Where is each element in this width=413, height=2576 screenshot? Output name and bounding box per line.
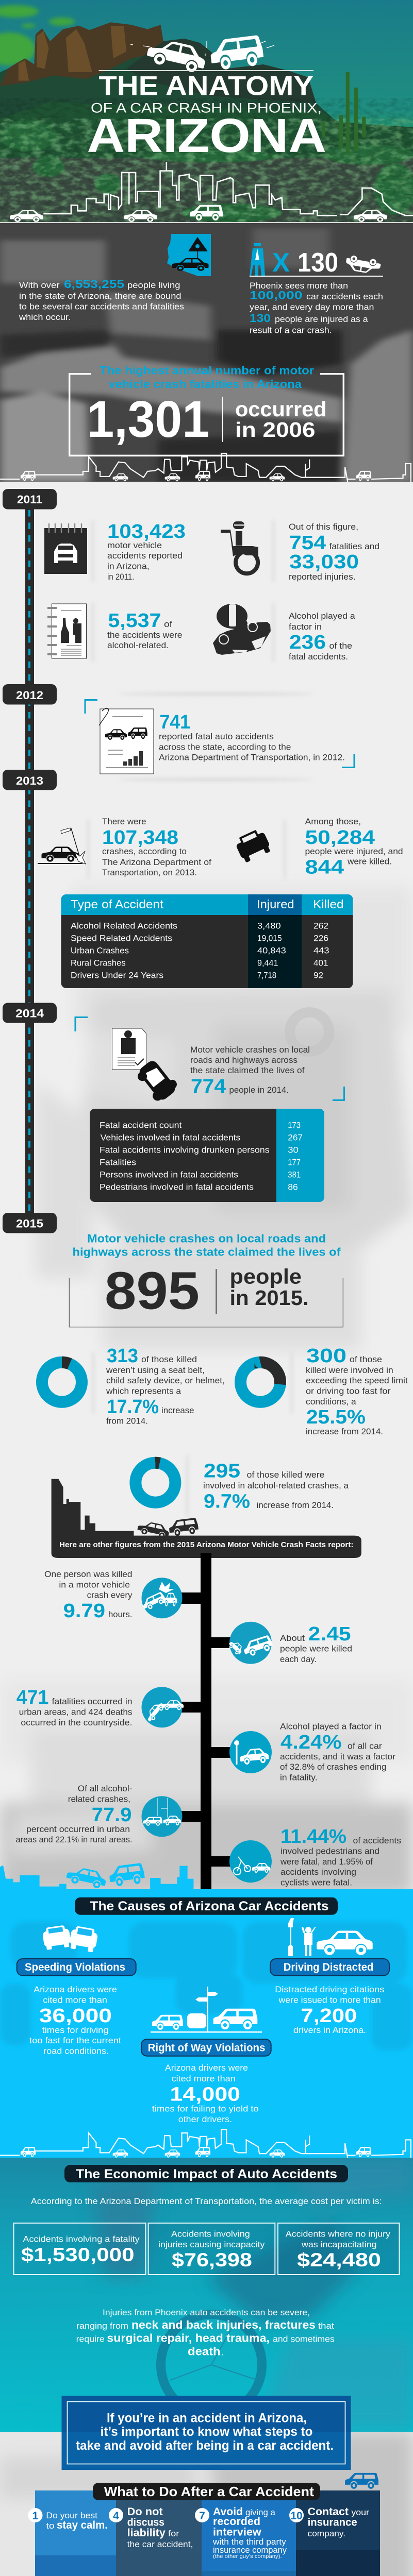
text: average cost intro: According to the Arizona Department of Transportation, the average cost per victim is:	[31, 2196, 382, 2206]
callout: highest annual fatalities: occurred	[235, 397, 327, 421]
stat: alcohol 4.24%: of all car	[348, 1742, 382, 1751]
icon: Arizona map with warning sign	[167, 234, 211, 276]
text block: Phoenix accidents: 100,000	[250, 289, 302, 302]
text block: 107,348 crashes: Transportation, on 2013.	[102, 868, 197, 877]
table: type of accident: Injured	[257, 897, 294, 911]
stat: 2.45 killed each day: each day.	[280, 1655, 317, 1664]
heading: what to do: What to Do After a Car Accident	[104, 2484, 314, 2499]
2014 lives claimed: the state claimed the lives of	[190, 1066, 305, 1075]
icon: notebook with bottle and person	[47, 604, 87, 658]
icon: blue skyline with crash	[0, 1863, 193, 1890]
timeline road	[25, 507, 34, 1214]
text block: population: to be several car accidents and fatalities	[19, 302, 184, 312]
cause: speeding violations: Speeding Violations	[25, 1961, 125, 1973]
text block: alcohol-related: of	[164, 620, 173, 629]
text block: alcohol-related: 5,537	[108, 610, 161, 632]
cause: speeding violations: 36,000	[39, 2005, 112, 2027]
table: type of accident: 9,441	[257, 959, 278, 968]
table: type of accident: 443	[313, 946, 329, 956]
text block: Phoenix accidents: year, and every day more than	[250, 303, 374, 312]
callout: highest annual fatalities: The highest annual number of motor	[100, 364, 314, 377]
stat: 471 urban fatalities	[16, 1687, 184, 1727]
stat: 11.44% pedestrians: were fatal, and 1.95% of	[280, 1857, 373, 1867]
table: type of accident: Rural Crashes	[71, 959, 126, 968]
heading: economic impact: The Economic Impact of Auto Accidents	[76, 2167, 337, 2181]
text block: 295 alcohol	[203, 1461, 349, 1513]
stat box: fatality cost	[13, 2223, 145, 2275]
stat: 471 urban fatalities: occurred in the countryside.	[21, 1718, 133, 1727]
table: type of accident: 226	[313, 934, 328, 943]
table: type of accident: Drivers Under 24 Years	[71, 971, 163, 980]
table: 2014 fatal accident statistics: 267	[288, 1133, 303, 1142]
text block: Phoenix accidents: people are injured as a	[275, 315, 369, 324]
text block: 754 fatalities: 33,030	[289, 551, 359, 573]
stat: 11.44% pedestrians: involved pedestrians and	[280, 1847, 379, 1856]
callout: 895 people in 2015	[69, 1261, 343, 1327]
callout: 895 people in 2015: 895	[105, 1261, 200, 1320]
cause: speeding violations: cited more than	[43, 1996, 107, 2005]
2014 lives claimed: people in 2014.	[229, 1086, 289, 1095]
text block: 295 alcohol: increase from 2014.	[257, 1501, 334, 1510]
stat: 2.45 killed each day: About	[280, 1634, 305, 1643]
text block: 103,423 accidents: in 2011.	[107, 572, 134, 582]
text block: 50,284 injured: Among those,	[305, 817, 361, 826]
title: OF A CAR CRASH IN PHOENIX,	[91, 100, 322, 115]
table: type of accident: Urban Crashes	[71, 946, 129, 956]
text block: 300 speeding: exceeding the speed limit	[306, 1376, 408, 1385]
text block: injuries: .	[221, 2348, 224, 2358]
callout: know what steps: If you’re in an accident in Arizona,	[107, 2411, 307, 2426]
stat: alcohol 4.24%: accidents, and it was a factor	[280, 1752, 396, 1761]
step 7: interview	[213, 2527, 261, 2538]
heading: 2015 lives claimed: Motor vehicle crashes on local roads and	[87, 1232, 326, 1245]
step 4: 4	[113, 2510, 119, 2522]
stat: one person every 9.79 hours: in a motor vehicle	[59, 1581, 130, 1590]
step 1: stay calm.	[57, 2519, 108, 2531]
year marker 2011	[3, 489, 57, 509]
text block: population: in the state of Arizona, there are bound	[19, 292, 181, 301]
table: 2014 fatal accident statistics: Fatalities	[100, 1158, 136, 1167]
cause: speeding violations: times for driving	[42, 2026, 108, 2035]
text block: 300 speeding: of those	[350, 1355, 382, 1364]
table: type of accident: 401	[313, 959, 328, 968]
callout: 895 people in 2015: people	[230, 1265, 302, 1289]
2012 fatal auto accidents: Arizona Department of Transportation, in 2012.	[159, 753, 345, 762]
text block: alcohol fatal accidents: of the	[329, 641, 352, 651]
text block: injuries: and sometimes	[273, 2335, 335, 2344]
title: ARIZONA	[87, 109, 326, 162]
table: type of accident: Alcohol Related Accidents	[71, 922, 177, 931]
text block: 300 speeding: increase from 2014.	[306, 1427, 383, 1436]
year marker 2012: 2012	[16, 689, 43, 702]
step 10	[289, 2506, 370, 2538]
stat box: fatality cost: Accidents involving a fatality	[23, 2235, 140, 2244]
text block: 300 speeding: conditions, a	[306, 1397, 357, 1406]
cause: speeding violations	[17, 1925, 136, 2056]
table: 2014 fatal accident statistics: Fatal accidents involving drunken persons	[100, 1145, 270, 1155]
text block: 103,423 accidents: in Arizona,	[107, 562, 150, 571]
step 4	[109, 2506, 193, 2549]
text block: alcohol-related: the accidents were	[107, 631, 183, 640]
text block: 300 speeding	[306, 1345, 408, 1436]
table: type of accident: 3,480	[257, 922, 281, 931]
2012 fatal auto accidents: 741	[160, 711, 190, 733]
text block: 313 seat belt: weren’t using a seat belt,	[106, 1366, 205, 1375]
text block: 300 speeding: or driving too fast for	[306, 1387, 391, 1396]
stat: 77.9 percent urban: percent occurred in urban	[26, 1825, 130, 1834]
text block: 754 fatalities: Out of this figure,	[289, 522, 358, 532]
year marker 2014	[3, 1003, 57, 1023]
text block: 300 speeding: 25.5%	[306, 1406, 366, 1428]
cause: driving distracted: 7,200	[301, 2005, 357, 2027]
text block: injuries	[76, 2308, 335, 2358]
step 7: Avoid	[213, 2506, 243, 2518]
callout: highest annual fatalities: in 2006	[235, 418, 316, 442]
banner: other figures with black skyline: Here are other figures from the 2015 Arizona Motor Vehicle Crash Facts report:	[59, 1540, 354, 1549]
text block: injuries: death	[188, 2345, 221, 2358]
step 7: with the third party	[212, 2537, 287, 2547]
cause: speeding violations: road conditions.	[43, 2047, 109, 2056]
stat: 77.9 percent urban	[16, 1784, 182, 1844]
step 4: discuss	[127, 2517, 164, 2529]
stat: one person every 9.79 hours: One person was killed	[44, 1570, 132, 1579]
panel: timeline background	[0, 893, 413, 1889]
text block: 313 seat belt: increase	[161, 1406, 194, 1415]
cause: right of way violations: times for failing to yield to	[152, 2105, 259, 2114]
text block: injuries: Injuries from Phoenix auto accidents can be severe,	[103, 2308, 310, 2317]
table: type of accident: Speed Related Accidents	[71, 934, 172, 943]
text block: alcohol fatal accidents: fatal accidents.	[289, 652, 348, 662]
stat: 11.44% pedestrians: accidents involving	[280, 1868, 356, 1877]
text block: 107,348 crashes: crashes, according to	[102, 847, 187, 856]
cause: driving distracted: were issued to more than	[278, 1996, 381, 2005]
text block: Phoenix accidents: Phoenix sees more than	[250, 281, 348, 291]
step 1: 1	[32, 2510, 39, 2522]
cause: driving distracted: drivers in Arizona.	[293, 2026, 366, 2035]
divider line	[0, 222, 413, 223]
table: 2014 fatal accident statistics: Persons involved in fatal accidents	[100, 1170, 238, 1179]
callout: know what steps	[62, 2396, 351, 2470]
stat box: non-incapacitating cost: was incapacitating	[301, 2240, 376, 2249]
stat: 471 urban fatalities: fatalities occurred in	[52, 1697, 132, 1706]
text block: 295 alcohol: 9.7%	[204, 1491, 250, 1513]
table: 2014 fatal accident statistics: 30	[288, 1145, 299, 1155]
stat: 77.9 percent urban: Of all alcohol-	[78, 1784, 132, 1793]
year marker 2011: 2011	[17, 493, 42, 506]
2012 fatal auto accidents	[85, 700, 354, 774]
table: type of accident: 19,015	[257, 934, 282, 943]
text block: alcohol fatal accidents	[289, 612, 356, 662]
table: 2014 fatal accident statistics	[90, 1109, 324, 1202]
text block: 300 speeding: 300	[306, 1345, 346, 1367]
text block: 313 seat belt: 17.7%	[107, 1396, 159, 1418]
step 7: recorded	[213, 2516, 260, 2528]
text block: injuries: ranging from	[76, 2321, 128, 2331]
text block: 103,423 accidents	[107, 521, 186, 582]
2014 lives claimed: roads and highways across	[190, 1056, 298, 1065]
text block: alcohol fatal accidents: 236	[289, 632, 326, 653]
stat box: incapacity cost	[148, 2223, 275, 2275]
text block: 313 seat belt: from 2014.	[106, 1417, 148, 1426]
year marker 2014: 2014	[15, 1007, 44, 1020]
icon: police officer and 130 crashes: 130	[298, 248, 338, 278]
callout: know what steps: take and avoid after being in a car accident.	[76, 2438, 334, 2453]
text block: 50,284 injured: people were injured, and	[305, 847, 403, 856]
text block: 754 fatalities: reported injuries.	[289, 572, 356, 582]
text block: population: 6,553,255	[64, 278, 124, 291]
icon: crashed car front	[234, 827, 272, 863]
title: THE ANATOMY	[99, 71, 313, 101]
icon: overturned car with bottle thought	[213, 604, 271, 655]
text block: 107,348 crashes	[102, 817, 211, 877]
text block: 50,284 injured: 50,284	[305, 827, 375, 849]
text block: 313 seat belt: child safety device, or helmet,	[106, 1376, 225, 1385]
callout: know what steps: it’s important to know what steps to	[101, 2425, 312, 2439]
stat: 471 urban fatalities: 471	[16, 1687, 48, 1708]
step 7	[195, 2506, 287, 2560]
step 4: the car accident,	[127, 2540, 193, 2549]
table: 2014 fatal accident statistics: Fatal accident count	[100, 1121, 182, 1130]
text block: 50,284 injured	[305, 817, 403, 878]
year marker 2013: 2013	[16, 774, 43, 787]
year marker 2012	[3, 684, 57, 705]
2014 lives claimed: Motor vehicle crashes on local	[190, 1045, 310, 1055]
decorative shadows	[88, 520, 314, 1516]
panel: hero header	[0, 0, 413, 223]
text block: 313 seat belt: which represents a	[106, 1387, 181, 1396]
text block: alcohol-related	[107, 610, 183, 650]
stat: 11.44% pedestrians: cyclists were fatal.	[280, 1878, 352, 1888]
text block: 313 seat belt	[106, 1345, 225, 1426]
stat box: incapacity cost: $76,398	[172, 2249, 252, 2270]
step 10: 10	[290, 2510, 303, 2522]
stat box: non-incapacitating cost: $24,480	[297, 2249, 381, 2270]
text block: population: which occur.	[19, 313, 71, 322]
text block: 107,348 crashes: The Arizona Department of	[102, 858, 211, 867]
2014 lives claimed: 774	[191, 1076, 226, 1097]
text block: 103,423 accidents: 103,423	[107, 521, 186, 543]
callout: highest annual fatalities	[70, 364, 343, 455]
step 4: liability	[127, 2527, 166, 2539]
stat: 471 urban fatalities: urban areas, and 424 deaths	[19, 1708, 132, 1717]
stat box: fatality cost: $1,530,000	[21, 2244, 135, 2265]
step 1	[28, 2508, 108, 2531]
stat box: non-incapacitating cost	[278, 2223, 399, 2275]
callout: highest annual fatalities: 1,301	[87, 391, 209, 448]
icon: car hitting pole	[38, 828, 86, 864]
text block: 107,348 crashes: 107,348	[102, 827, 178, 849]
stat: 11.44% pedestrians: 11.44%	[280, 1826, 346, 1848]
text block: 103,423 accidents: accidents reported	[107, 551, 183, 561]
icon: police officer and 130 crashes: X	[272, 248, 290, 278]
title	[87, 70, 326, 162]
heading: causes: The Causes of Arizona Car Accidents	[90, 1899, 328, 1913]
heading: 2015 lives claimed: highways across the state claimed the lives of	[72, 1246, 341, 1259]
text block: 754 fatalities	[289, 522, 379, 582]
icon: crashing cars	[130, 35, 274, 73]
banner: other figures with black skyline	[52, 1479, 361, 1558]
stat: alcohol 4.24%: of 32.8% of crashes ending	[280, 1762, 386, 1772]
table: 2014 fatal accident statistics: 177	[288, 1158, 301, 1167]
cause: right of way violations: 14,000	[170, 2084, 240, 2106]
panel: causes of Arizona car accidents	[0, 1889, 413, 2158]
cause: driving distracted	[270, 1918, 389, 2035]
year marker 2015: 2015	[16, 1217, 43, 1230]
stat: one person every 9.79 hours: 9.79	[63, 1600, 105, 1622]
table: type of accident: 7,718	[257, 971, 276, 980]
2012 fatal auto accidents: reported fatal auto accidents	[159, 732, 274, 741]
stat: 11.44% pedestrians	[229, 1826, 401, 1888]
table: 2014 fatal accident statistics: Vehicles involved in fatal accidents	[101, 1133, 240, 1142]
text block: 295 alcohol: involved in alcohol-related crashes, a	[203, 1481, 349, 1490]
text block: Phoenix accidents: result of a car crash.	[250, 326, 332, 335]
icon: phoenix skyline with cars	[10, 162, 413, 222]
cause: right of way violations: Arizona drivers were	[165, 2063, 248, 2073]
panel: economic impact	[0, 2158, 413, 2432]
text block: 313 seat belt: 313	[107, 1345, 138, 1367]
step 10: your	[351, 2508, 370, 2517]
stat: 2.45 killed each day: people were killed	[280, 1645, 352, 1654]
text block: 295 alcohol: of those killed were	[247, 1470, 324, 1480]
panel: what to do columns	[35, 2490, 380, 2576]
step 7: (the other guy’s company).	[213, 2553, 282, 2560]
panel: what to do background photo	[0, 2432, 413, 2576]
text block: injuries: surgical repair, head trauma,	[107, 2332, 270, 2345]
text block: alcohol-related: alcohol-related.	[107, 641, 169, 650]
table: type of accident: 262	[313, 922, 328, 931]
step 4: Do not	[127, 2506, 163, 2518]
text block: population: people living	[127, 281, 180, 290]
icon: calendar with car	[44, 523, 87, 574]
text block: population	[19, 278, 184, 322]
cause: right of way violations: cited more than	[172, 2074, 236, 2083]
cause: right of way violations: other drivers.	[178, 2115, 232, 2124]
text block: 754 fatalities: 754	[289, 532, 326, 554]
cause: speeding violations: too fast for the current	[29, 2036, 121, 2045]
2012 fatal auto accidents: across the state, according to the	[159, 743, 291, 752]
cause: driving distracted: Distracted driving citations	[275, 1985, 384, 1994]
step 1: to	[46, 2521, 55, 2531]
table: 2014 fatal accident statistics: 86	[288, 1182, 298, 1192]
chart: donut 295 alcohol	[136, 1463, 175, 1502]
stat: 77.9 percent urban: 77.9	[92, 1804, 131, 1826]
text block: 103,423 accidents: motor vehicle	[107, 541, 162, 550]
stat: one person every 9.79 hours: crash every	[87, 1591, 133, 1600]
step 10: insurance	[308, 2517, 357, 2529]
step 7: 7	[199, 2510, 205, 2522]
stat: alcohol 4.24%: 4.24%	[280, 1732, 341, 1753]
table: type of accident	[61, 894, 353, 988]
panel: dark junkyard intro	[0, 223, 413, 483]
text block: 50,284 injured: were killed.	[347, 857, 392, 867]
text block: Phoenix accidents	[250, 281, 383, 335]
stat box: incapacity cost: Accidents involving	[171, 2230, 250, 2239]
stat: one person every 9.79 hours	[44, 1570, 183, 1622]
icon: white skyline on blue	[0, 2129, 411, 2158]
table: 2014 fatal accident statistics: 381	[288, 1170, 301, 1179]
text block: 107,348 crashes: There were	[102, 817, 146, 826]
step 1: Do your best	[46, 2511, 97, 2520]
2014 lives claimed	[75, 1017, 344, 1105]
icon: small white skyline	[0, 453, 411, 482]
step 10: company.	[308, 2529, 345, 2538]
stat: alcohol 4.24%: in fatality.	[280, 1773, 318, 1783]
step 10: Contact	[308, 2506, 349, 2518]
stat: 77.9 percent urban: areas and 22.1% in rural areas.	[16, 1835, 132, 1844]
callout: 895 people in 2015: in 2015.	[230, 1286, 309, 1310]
text block: Phoenix accidents: 130	[250, 312, 271, 325]
icon: blue SUV on heading	[345, 2473, 378, 2488]
stat: 77.9 percent urban: related crashes,	[68, 1795, 130, 1804]
text block: alcohol fatal accidents: Alcohol played a	[289, 612, 356, 621]
table: 2014 fatal accident statistics: 173	[288, 1121, 301, 1130]
stat box: non-incapacitating cost: Accidents where no injury	[286, 2230, 391, 2239]
chart: donut 300 speeding	[240, 1362, 280, 1402]
text block: 313 seat belt: of those killed	[141, 1355, 197, 1364]
step 4: for	[168, 2529, 179, 2538]
cause: right of way violations	[141, 1987, 271, 2124]
callout: highest annual fatalities: vehicle crash fatalities in Arizona	[108, 378, 302, 391]
icon: wheelchair	[221, 521, 258, 573]
step 7: insurance company	[213, 2546, 287, 2555]
stat: 11.44% pedestrians: of accidents	[353, 1836, 401, 1845]
chart: donut 313 seat belt	[42, 1362, 81, 1402]
stat: 2.45 killed each day: 2.45	[308, 1623, 351, 1645]
cause: speeding violations: Arizona drivers were	[34, 1985, 117, 1994]
table: 2014 fatal accident statistics: Pedestrians involved in fatal accidents	[100, 1182, 254, 1192]
table: type of accident: Type of Accident	[71, 897, 164, 911]
text block: injuries: that	[318, 2321, 335, 2331]
icon: police officer and 130 crashes	[250, 243, 383, 278]
text block: 295 alcohol: 295	[204, 1461, 240, 1482]
cause: driving distracted: Driving Distracted	[284, 1961, 373, 1973]
stat: alcohol 4.24%: Alcohol played a factor in	[280, 1722, 382, 1732]
text block: 754 fatalities: fatalities and	[329, 542, 379, 551]
step 7: giving a	[245, 2508, 276, 2517]
text block: injuries: neck and back injuries, fractures	[131, 2318, 316, 2331]
text block: injuries: require	[76, 2335, 105, 2344]
text block: 50,284 injured: 844	[305, 857, 344, 878]
table: type of accident: 40,843	[257, 946, 286, 956]
cause: right of way violations: Right of Way Violations	[148, 2042, 265, 2054]
heading: 2015 lives claimed	[72, 1232, 341, 1259]
text block: population: With over	[19, 281, 60, 290]
year marker 2015	[3, 1213, 57, 1233]
stat: one person every 9.79 hours: hours.	[108, 1610, 132, 1619]
stat box: incapacity cost: injuries causing incapacity	[158, 2240, 265, 2249]
text block: 300 speeding: killed were involved in	[306, 1366, 393, 1375]
stat: alcohol 4.24%	[229, 1722, 396, 1783]
spine with branches	[181, 1553, 230, 1889]
text block: alcohol fatal accidents: factor in	[289, 622, 322, 632]
year marker 2013	[3, 770, 57, 790]
text block: Phoenix accidents: car accidents each	[306, 292, 383, 301]
table: type of accident: 92	[313, 971, 323, 980]
stat: 2.45 killed each day	[227, 1622, 352, 1664]
table: type of accident: Killed	[313, 897, 344, 911]
